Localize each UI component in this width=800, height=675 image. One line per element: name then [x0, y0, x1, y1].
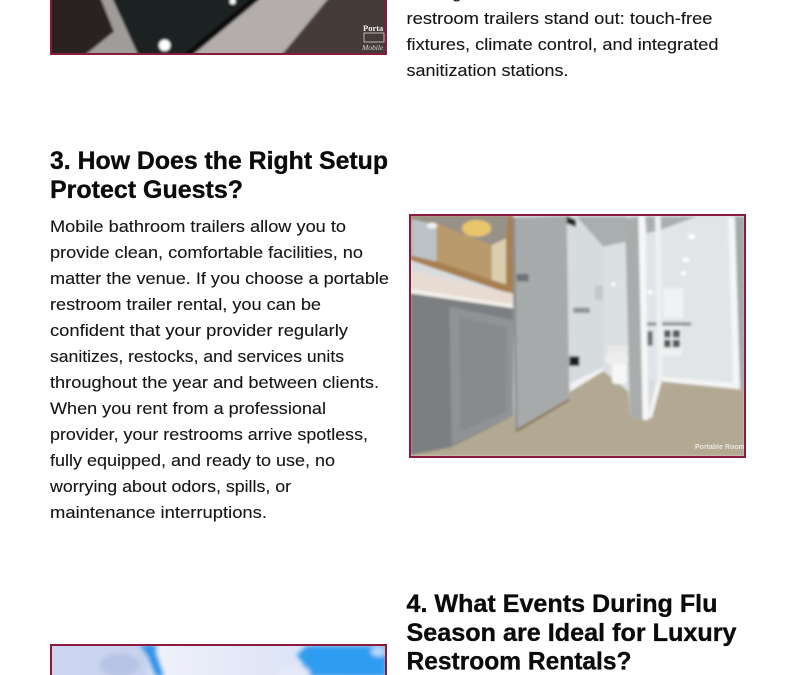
heading: section 3: Protect Guests? — [50, 176, 243, 204]
text block: section 3 body: matter the venue. If you choose a portable — [50, 269, 389, 288]
photo: trailer interior with dark counter (top left): Porta — [363, 23, 384, 33]
text block: end of section 2: sanitization stations. — [406, 61, 568, 80]
heading: section 3: 3. How Does the Right Setup — [50, 147, 388, 175]
photo: restroom trailer interior with vanity, door and toilet — [410, 215, 745, 457]
text block: section 3 body: throughout the year and between clients. — [50, 373, 379, 392]
heading: section 4 — [406, 590, 737, 675]
text block: section 3 body: When you rent from a professional — [50, 399, 326, 418]
text block: section 3 body: provider, your restrooms arrive spotless, — [50, 425, 368, 444]
text block: section 3 body: Mobile bathroom trailers allow you to — [50, 217, 346, 236]
text block: section 3 body: worrying about odors, spills, or — [49, 477, 291, 496]
text block: section 3 body: sanitizes, restocks, and services units — [50, 347, 344, 366]
photo: blue sky with clouds (bottom left) — [50, 644, 387, 675]
text block: end of section 2: restroom trailers stand out: touch-free — [406, 9, 712, 28]
heading: section 4: Season are Ideal for Luxury — [406, 619, 737, 647]
text block: end of section 2 — [406, 0, 718, 80]
heading: section 4: 4. What Events During Flu — [406, 590, 718, 618]
photo: restroom trailer interior with vanity, door and toilet: Portable Room — [695, 444, 745, 451]
text block: section 3 body: maintenance interruptions. — [50, 503, 267, 522]
text block: section 3 body: restroom trailer rental, you can be — [50, 295, 321, 314]
photo: trailer interior with dark counter (top left): Mobile — [361, 43, 384, 52]
photo: trailer interior with dark counter (top left) — [48, 0, 388, 57]
text block: section 3 body: provide clean, comfortable facilities, no — [50, 243, 363, 262]
text block: section 3 body: confident that your provider regularly — [50, 321, 349, 340]
heading: section 3 — [50, 147, 388, 204]
heading: section 4: Restroom Rentals? — [406, 648, 632, 675]
text block: end of section 2: fixtures, climate control, and integrated — [406, 35, 718, 54]
text block: section 3 body: fully equipped, and ready to use, no — [50, 451, 335, 470]
text block: section 3 body — [49, 217, 389, 522]
